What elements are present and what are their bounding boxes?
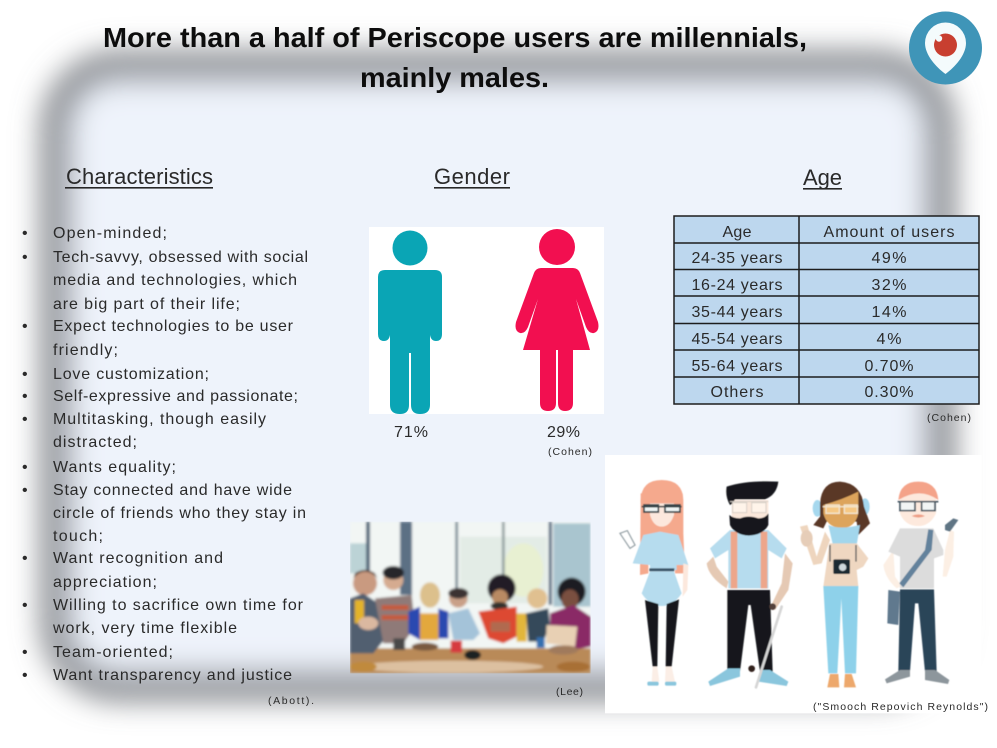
characteristics list: • [22, 225, 28, 242]
characteristics list: Want recognition and [53, 550, 223, 567]
characteristics list [22, 225, 314, 707]
characteristics list: touch; [53, 528, 103, 545]
characteristics list: work, very time flexible [52, 620, 237, 637]
title [103, 22, 807, 93]
characteristics list: • [22, 388, 28, 405]
heading: Characteristics: Characteristics [66, 164, 213, 189]
photo: group of young people with devices [350, 522, 591, 673]
characteristics list: appreciation; [53, 574, 157, 591]
characteristics list: Love customization; [53, 366, 209, 383]
title: More than a half of Periscope users are millennials, [103, 22, 807, 53]
age table: 24-35 years [692, 250, 782, 267]
characteristics list: • [22, 667, 28, 684]
age table: 32% [872, 277, 906, 294]
person 7 [558, 578, 586, 606]
characteristics list: • [22, 597, 28, 614]
age table: 49% [872, 250, 906, 267]
characteristics list: distracted; [53, 434, 137, 451]
age table: Amount of users [824, 224, 954, 241]
gender percentages: (Cohen) [548, 446, 592, 458]
citation: Lee: (Lee) [556, 686, 583, 698]
characteristics list: Want transparency and justice [53, 667, 292, 684]
characteristics list: Stay connected and have wide [53, 482, 292, 499]
characteristics list: • [22, 550, 28, 567]
age table: 4% [876, 331, 902, 348]
characteristics list: Multitasking, though easily [53, 411, 266, 428]
characteristics list: Self-expressive and passionate; [53, 388, 298, 405]
characteristics list: (Abott). [268, 695, 314, 707]
characteristics list: • [22, 644, 28, 661]
age table: Others [710, 384, 764, 401]
characteristics list: Team-oriented; [53, 644, 173, 661]
age table: 16-24 years [692, 277, 782, 294]
citation: Cohen: (Cohen) [927, 412, 971, 424]
person 5 [488, 574, 516, 602]
characteristics list: circle of friends who they stay in [53, 505, 306, 522]
person 6 [517, 613, 527, 642]
illustration: four hipster characters [605, 455, 982, 713]
gender percentages: 71% [394, 424, 428, 441]
character: bearded man with skateboard [707, 481, 793, 687]
character: woman with phone [620, 480, 688, 686]
icon: female figure [516, 229, 598, 411]
panel: gender figures [369, 227, 604, 414]
age table: 0.30% [864, 384, 914, 401]
heading: Gender: Gender [434, 164, 510, 189]
characteristics list: • [22, 366, 28, 383]
age table: 45-54 years [692, 331, 782, 348]
age table: 35-44 years [692, 304, 782, 321]
characteristics list: friendly; [53, 342, 118, 359]
citation: Smooch Repovich Reynolds: ("Smooch Repovich Reynolds") [813, 701, 988, 713]
age table: 14% [872, 304, 906, 321]
characteristics list: • [22, 411, 28, 428]
title: mainly males. [360, 62, 549, 93]
characteristics list: • [22, 249, 28, 266]
age table: Age [722, 224, 752, 241]
gender percentages: 29% [547, 424, 580, 441]
age table: 0.70% [864, 358, 914, 375]
characteristics list: are big part of their life; [53, 296, 240, 313]
icon: Periscope logo [909, 12, 982, 84]
person 1 [353, 571, 377, 595]
person 3 [420, 582, 440, 608]
heading: Age: Age [803, 165, 842, 190]
characteristics list: • [22, 482, 28, 499]
person 4 [448, 594, 469, 609]
characteristics list: Tech-savvy, obsessed with social [53, 249, 308, 266]
characteristics list: media and technologies, which [53, 272, 297, 289]
characteristics list: Expect technologies to be user [53, 318, 294, 335]
gender percentages [394, 424, 592, 458]
character: woman with camera [800, 482, 870, 687]
age table: 55-64 years [692, 358, 782, 375]
person 2 [383, 570, 403, 590]
characteristics list: Open-minded; [53, 225, 167, 242]
age table [674, 216, 979, 404]
icon: male figure [378, 230, 442, 414]
characteristics list: Willing to sacrifice own time for [53, 597, 304, 614]
characteristics list: • [22, 459, 28, 476]
characteristics list: Wants equality; [53, 459, 176, 476]
character: man with messenger bag [883, 482, 958, 684]
characteristics list: • [22, 318, 28, 335]
